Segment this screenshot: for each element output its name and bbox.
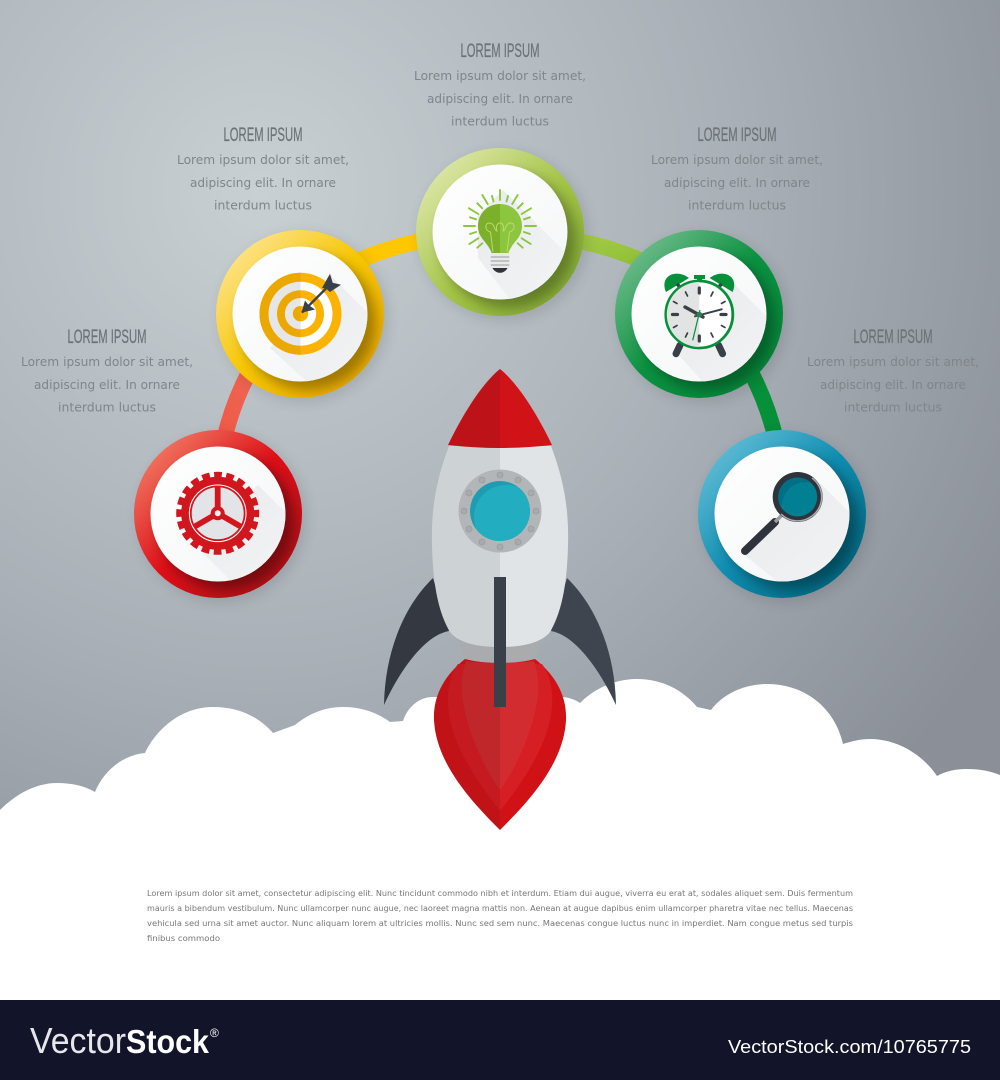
body text: Lorem ipsum dolor sit amet, [21,355,193,369]
icon: target with arrow [260,273,342,355]
text block: left upper [177,125,349,212]
body text: adipiscing elit. In ornare [34,378,180,392]
paragraph: finibus commodo [147,934,220,943]
text block: center [414,41,586,128]
body text: adipiscing elit. In ornare [427,92,573,106]
node: clock [615,230,789,404]
icon: light bulb [464,190,536,273]
body text: adipiscing elit. In ornare [190,176,336,190]
icon: gear [180,476,255,551]
paragraph: Lorem ipsum dolor sit amet, consectetur adipiscing elit. Nunc tincidunt commodo nibh et interdum. Etiam dui augue, viverra eu erat at, sodales aliquet sem. Duis fermentum [147,889,853,898]
body text: Lorem ipsum dolor sit amet, [651,153,823,167]
heading: LOREM IPSUM [854,327,932,348]
paragraph: mauris a bibendum vestibulum. Nunc ullamcorper nunc augue, nec laoreet magna mattis non. Aenean at augue dapibus enim ullamcorper pharetra vitae nec tellus. Maecenas [147,904,853,913]
node: target [216,230,390,404]
connector: green to blue [738,350,776,440]
body text: Lorem ipsum dolor sit amet, [177,153,349,167]
connector: yellow to lime [340,238,440,270]
body text: Lorem ipsum dolor sit amet, [414,69,586,83]
body text [414,69,586,128]
cloud [0,679,1000,1000]
body text: interdum luctus [844,400,942,414]
heading: LOREM IPSUM [460,41,540,62]
logo: VectorStock [30,1020,219,1061]
node: bulb [416,148,588,325]
image id: VectorStock.com/10765775 [728,1036,971,1057]
body text: Lorem ipsum dolor sit amet, [807,355,979,369]
body text [177,153,349,212]
body text [21,355,193,414]
rocket nose [448,369,552,448]
rocket body [432,446,568,647]
node: gear [134,430,320,610]
heading: LOREM IPSUM [68,327,146,348]
body text: interdum luctus [688,198,786,212]
connectors [224,238,776,440]
rocket center bar [494,577,506,707]
logo: VectorStock: ® [210,1026,219,1040]
rocket [384,369,616,830]
rocket fins [384,578,616,705]
body text: interdum luctus [58,400,156,414]
footer band [0,1000,1000,1080]
connector: lime to green [560,238,660,270]
icon: magnifying glass [745,472,823,551]
heading: LOREM IPSUM [698,125,776,146]
body text: interdum luctus [214,198,312,212]
heading: LOREM IPSUM [224,125,302,146]
paragraph: vehicula sed urna sit amet auctor. Nunc aliquam lorem at ultricies mollis. Nunc sed sem nunc. Maecenas congue luctus nunc in imperdiet. Nam congue metus sed turpis [147,919,853,928]
rocket skirt [458,640,542,661]
icon: alarm clock [664,274,734,354]
body text: interdum luctus [451,114,549,128]
body text: adipiscing elit. In ornare [664,176,810,190]
body text [807,355,979,414]
node: magnifier [698,430,872,604]
body text [651,153,823,212]
text block: left lower [21,327,193,414]
text block: right lower [807,327,979,414]
rocket flame [434,659,566,830]
text block: right upper [651,125,823,212]
body text: adipiscing elit. In ornare [820,378,966,392]
rocket window [458,470,542,552]
paragraph [147,889,853,943]
logo: VectorStock: Vector [30,1020,126,1061]
logo: VectorStock: Stock [126,1023,210,1060]
connector: red to yellow [224,350,262,440]
